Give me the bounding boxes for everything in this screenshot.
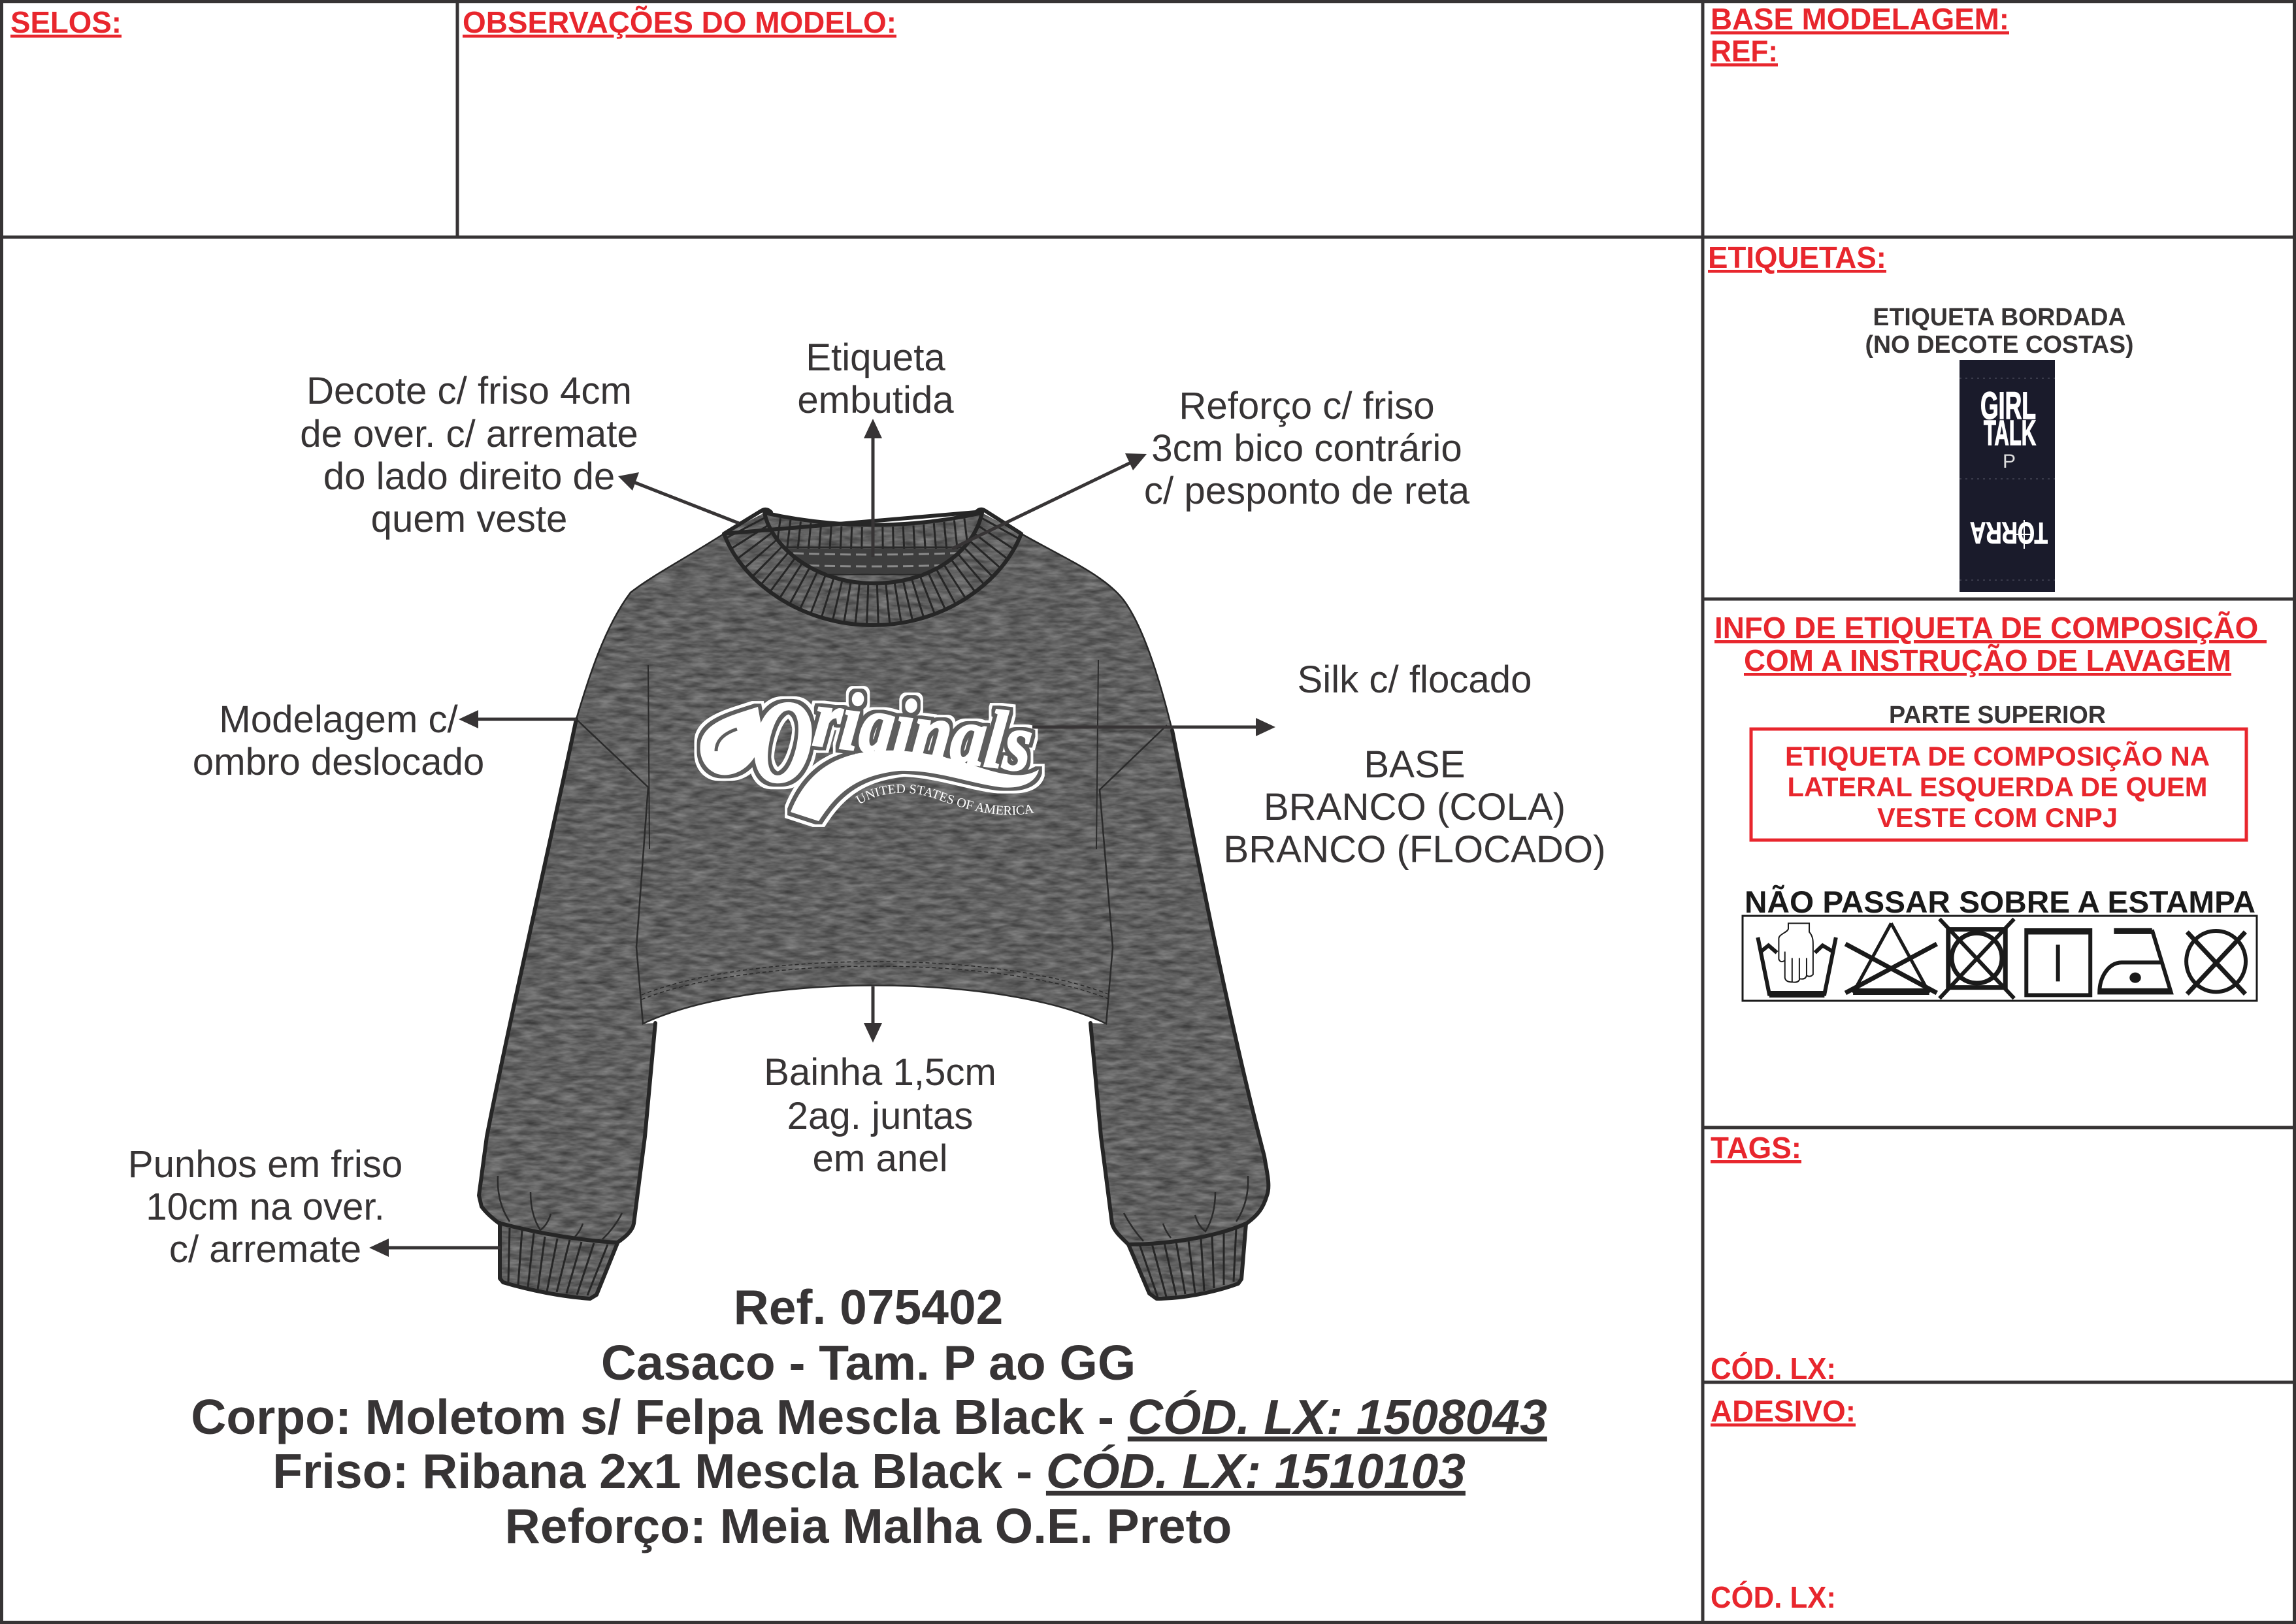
panel: tags	[1711, 1131, 1836, 1386]
icon: iron low	[2099, 930, 2171, 992]
heading: observações: OBSERVAÇÕES DO MODELO:	[463, 5, 896, 39]
callout: decote: Decote c/ friso 4cm	[306, 370, 632, 412]
collar rib	[724, 510, 1021, 625]
código lx: adesivo: CÓD. LX:	[1711, 1580, 1836, 1614]
arrow: reforço	[952, 453, 1147, 549]
callout: punhos: Punhos em friso	[128, 1143, 402, 1186]
heather fabric body	[457, 503, 1294, 1254]
sweater illustration	[459, 481, 1270, 1301]
etiqueta bordada caption: ETIQUETA BORDADA	[1873, 304, 2126, 331]
body seams	[498, 660, 1248, 1241]
callout: punhos: 10cm na over.	[146, 1186, 385, 1228]
print: Originals logo	[694, 672, 1045, 827]
etiqueta bordada caption	[1865, 304, 2134, 359]
print: united states of america: UNITED STATES OF AMERICA	[855, 784, 1034, 815]
heading: etiquetas: ETIQUETAS:	[1708, 240, 1886, 274]
arrow: decote	[618, 472, 739, 523]
callout: reforço: Reforço c/ friso	[1179, 385, 1435, 427]
heading: base modelagem: BASE MODELAGEM:	[1711, 2, 2009, 36]
heading: info de etiqueta: COM A INSTRUÇÃO DE LAVAGEM	[1744, 643, 2231, 677]
left cuff	[502, 1226, 615, 1297]
callout: reforço: 3cm bico contrário	[1151, 427, 1462, 470]
arrow: punhos	[369, 1239, 500, 1257]
callout: decote: quem veste	[371, 498, 567, 540]
callout: etiqueta embutida	[797, 336, 954, 421]
callout: bainha: Bainha 1,5cm	[764, 1051, 996, 1094]
arrow: etiqueta	[864, 419, 882, 557]
arrow: bainha	[864, 986, 882, 1043]
icon: no bleach	[1845, 923, 1937, 993]
callout: punhos	[128, 1143, 402, 1271]
heading: ref: REF:	[1711, 34, 1778, 68]
callout: modelagem	[193, 698, 484, 783]
heading: selos: SELOS:	[10, 5, 122, 39]
woven label: TALK	[1984, 414, 2036, 453]
product specification text: Casaco - Tam. P ao GG	[601, 1335, 1136, 1390]
product specification text	[191, 1280, 1547, 1553]
callout: bainha: em anel	[812, 1137, 948, 1180]
callout: modelagem: ombro deslocado	[193, 741, 484, 783]
icon: line dry	[2026, 930, 2090, 995]
care symbols box	[1743, 916, 2257, 1001]
woven label: TORRA	[1970, 516, 2048, 550]
heading: adesivo: ADESIVO:	[1711, 1394, 1856, 1428]
callout: etiqueta embutida: Etiqueta	[806, 336, 945, 379]
woven label: GIRL	[1980, 385, 2036, 427]
icon: do not tumble dry	[1939, 919, 2014, 998]
panel: base modelagem	[1711, 2, 2009, 68]
warning: não passar sobre a estampa: NÃO PASSAR SOBRE A ESTAMPA	[1745, 885, 2255, 919]
panel: etiquetas	[1708, 240, 2134, 592]
callout: decote: do lado direito de	[323, 455, 615, 498]
callout: silk: Silk c/ flocado	[1298, 658, 1532, 701]
print: Originals logo: O	[748, 674, 817, 809]
callout: decote: de over. c/ arremate	[300, 413, 638, 455]
red callout box	[1751, 729, 2246, 840]
panel: composição e lavagem	[1714, 611, 2267, 1001]
heading: tags: TAGS:	[1711, 1131, 1801, 1165]
parte superior: PARTE SUPERIOR	[1889, 702, 2106, 729]
product specification text: Corpo: Moletom s/ Felpa Mescla Black - CÓD. LX: 1508043	[191, 1389, 1547, 1444]
icon: do not dry clean	[2186, 931, 2246, 994]
callout: silk: BRANCO (COLA)	[1264, 786, 1566, 828]
woven label: P	[2003, 451, 2016, 472]
etiqueta bordada caption: (NO DECOTE COSTAS)	[1865, 331, 2134, 359]
callout: reforço	[1144, 385, 1470, 512]
arrow: modelagem	[459, 710, 576, 728]
callout: reforço: c/ pesponto de reta	[1144, 470, 1470, 512]
right cuff	[1132, 1227, 1244, 1297]
panel: adesivo	[1711, 1394, 1856, 1614]
back neck	[766, 512, 981, 575]
print: Originals logo: riginals	[810, 672, 1038, 790]
callout: etiqueta embutida: embutida	[797, 379, 954, 421]
callout: silk: BASE	[1364, 743, 1466, 786]
callout: modelagem: Modelagem c/	[219, 698, 459, 741]
código lx: tags: CÓD. LX:	[1711, 1352, 1836, 1386]
callout: silk: BRANCO (FLOCADO)	[1223, 828, 1606, 871]
heading: info de etiqueta: INFO DE ETIQUETA DE COMPOSIÇÃO	[1714, 611, 2267, 645]
heading: info de etiqueta	[1714, 611, 2267, 677]
woven label	[1960, 360, 2055, 592]
red callout box: LATERAL ESQUERDA DE QUEM	[1788, 771, 2207, 802]
icon: hand wash	[1758, 923, 1836, 994]
callout: punhos: c/ arremate	[169, 1228, 361, 1271]
sleeve outlines	[479, 534, 1268, 1299]
arrow: silk	[1032, 718, 1275, 736]
callout: silk	[1223, 658, 1606, 871]
product specification text: Friso: Ribana 2x1 Mescla Black - CÓD. LX: 1510103	[272, 1444, 1466, 1499]
product specification text: Reforço: Meia Malha O.E. Preto	[505, 1499, 1232, 1553]
red callout box: VESTE COM CNPJ	[1877, 802, 2118, 833]
callout: bainha: 2ag. juntas	[787, 1095, 973, 1137]
callout: decote	[300, 370, 638, 540]
callout: bainha	[764, 1051, 996, 1180]
red callout box: ETIQUETA DE COMPOSIÇÃO NA	[1785, 741, 2210, 771]
product specification text: Ref. 075402	[734, 1280, 1003, 1335]
